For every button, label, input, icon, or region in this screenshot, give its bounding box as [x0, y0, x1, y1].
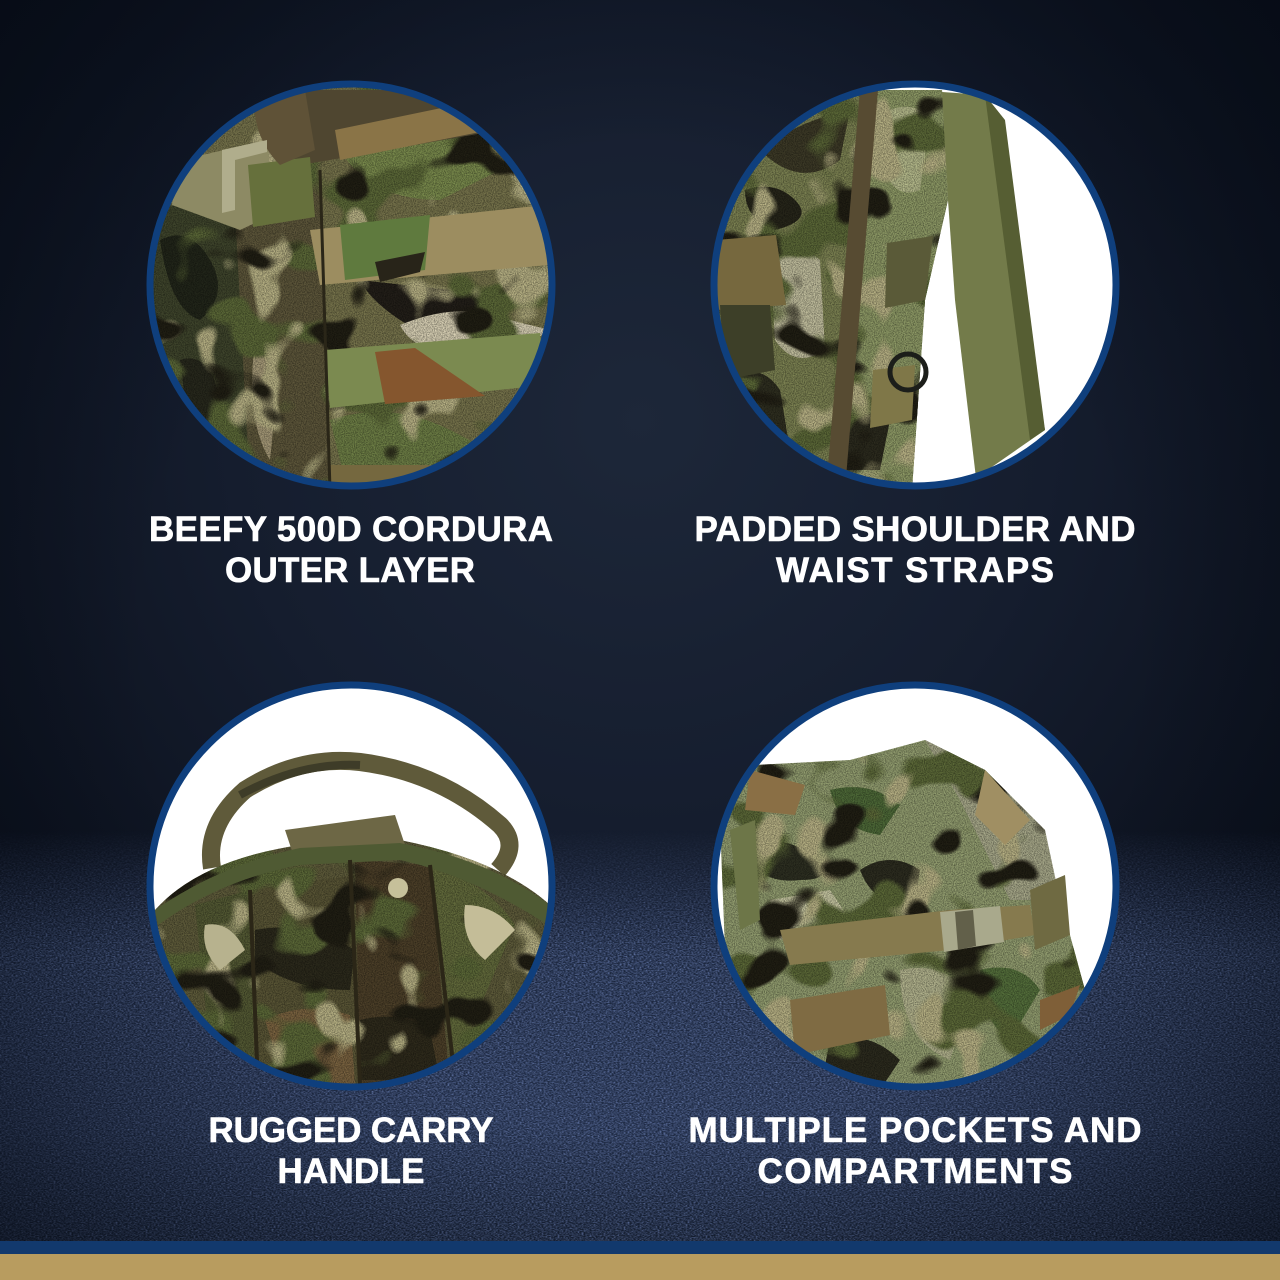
- footer bar: blue stripe: [0, 1241, 1280, 1254]
- caption: RUGGED CARRY: [208, 1111, 494, 1150]
- caption: [208, 1111, 494, 1191]
- photo: top handle: [147, 682, 555, 1090]
- footer bar: gold stripe: [0, 1254, 1280, 1280]
- caption: COMPARTMENTS: [758, 1152, 1072, 1191]
- photo: strap and side panel: [700, 81, 1119, 490]
- caption: HANDLE: [278, 1152, 424, 1191]
- panel: padded straps: [694, 81, 1136, 590]
- photo: backpack side with pockets: [711, 682, 1119, 1090]
- caption: [688, 1111, 1142, 1191]
- caption: [694, 510, 1136, 590]
- caption: WAIST STRAPS: [776, 551, 1054, 590]
- circle border: [714, 84, 1116, 486]
- caption: MULTIPLE POCKETS AND: [688, 1111, 1142, 1150]
- circle border: [714, 685, 1116, 1087]
- panel: carry handle: [147, 682, 555, 1191]
- panel: pockets: [688, 682, 1142, 1191]
- caption: OUTER LAYER: [225, 551, 475, 590]
- caption: PADDED SHOULDER AND: [694, 510, 1136, 549]
- circle border: [150, 685, 552, 1087]
- panel: cordura outer layer: [147, 81, 555, 590]
- caption: [149, 510, 553, 590]
- caption: BEEFY 500D CORDURA: [149, 510, 553, 549]
- photo: camo fabric with webbing: [147, 81, 555, 500]
- circle border: [150, 84, 552, 486]
